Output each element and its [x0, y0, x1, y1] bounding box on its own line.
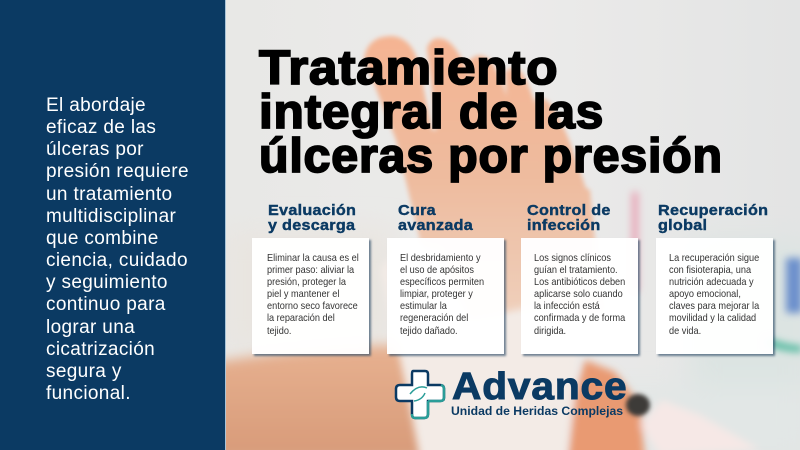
card: Control de infección: Los signos clínicos: [534, 253, 611, 264]
intro text: úlceras por: [46, 139, 144, 160]
heading: Control de infección: infección: [527, 218, 600, 234]
heading: Recuperación global: [658, 203, 768, 234]
card: Cura avanzada: limpiar, proteger y: [400, 289, 473, 300]
intro text: ciencia, cuidado: [46, 250, 188, 271]
instrument tip: [626, 394, 650, 416]
intro text: funcional.: [46, 383, 131, 404]
card: Control de infección: la infección está: [534, 301, 600, 312]
card: Control de infección: aplicarse solo cuando: [534, 289, 623, 300]
intro text: segura y: [46, 361, 122, 382]
intro text: presión requiere: [46, 161, 189, 182]
heading: Recuperación global: global: [658, 218, 707, 234]
card: Control de infección: [521, 238, 638, 354]
logo: Advance: [394, 366, 627, 420]
foot with toes: [364, 36, 602, 320]
card: Recuperación global: de vida.: [669, 326, 701, 337]
intro text: continuo para: [46, 294, 166, 315]
card: Recuperación global: nutrición adecuada y: [669, 277, 754, 288]
heading: Recuperación global: Recuperación: [658, 203, 768, 219]
heading: Control de infección: Control de: [527, 203, 611, 219]
heading: Evaluación y descarga: y descarga: [268, 218, 355, 234]
logo name: Advance: [452, 366, 627, 408]
leg: [215, 345, 440, 450]
icon: medical cross with hands: [394, 370, 446, 420]
card: Evaluación y descarga: tejido.: [267, 326, 291, 337]
intro text: lograr una: [46, 317, 135, 338]
card: Cura avanzada: estimular la: [400, 301, 447, 312]
intro text: y seguimiento: [46, 272, 168, 293]
card: Control de infección: dirigida.: [534, 326, 566, 337]
gloved hand and instrument: [380, 192, 800, 450]
card: Evaluación y descarga: primer paso: aliviar la: [267, 265, 354, 276]
card: Evaluación y descarga: presión, proteger la: [267, 277, 346, 288]
card: Evaluación y descarga: [252, 238, 369, 354]
card: Cura avanzada: El desbridamiento y: [400, 253, 481, 264]
card: Recuperación global: [656, 238, 773, 354]
heading: Cura avanzada: [398, 203, 474, 234]
title: integral de las: [259, 86, 604, 139]
heading: Cura avanzada: Cura: [398, 203, 436, 219]
card: Cura avanzada: regeneración del: [400, 313, 468, 324]
card: Evaluación y descarga: Eliminar la causa es el: [267, 253, 359, 264]
card: Recuperación global: movilidad y la calidad: [669, 313, 756, 324]
intro text: El abordaje: [46, 95, 146, 116]
title: Tratamiento: [259, 42, 558, 95]
title: úlceras por presión: [259, 130, 723, 183]
heading: Evaluación y descarga: [268, 203, 356, 234]
card: Evaluación y descarga: entorno seco favorece: [267, 301, 358, 312]
logo tagline: Unidad de Heridas Complejas: [451, 404, 623, 418]
intro text: un tratamiento: [46, 184, 172, 205]
background photo: foot and gloved hands: [226, 0, 800, 450]
card: Recuperación global: con fisioterapia, una: [669, 265, 751, 276]
intro text: que combine: [46, 228, 159, 249]
card: Control de infección: guían el tratamiento.: [534, 265, 618, 276]
intro text: cicatrización: [46, 339, 155, 360]
card: Evaluación y descarga: la reparación del: [267, 313, 335, 324]
card: Control de infección: confirmada y de forma: [534, 313, 625, 324]
card: Recuperación global: La recuperación sigue: [669, 253, 759, 264]
card: Cura avanzada: el uso de apósitos: [400, 265, 474, 276]
card: Cura avanzada: tejido dañado.: [400, 326, 458, 337]
intro text: eficaz de las: [46, 117, 156, 138]
heading: Cura avanzada: avanzada: [398, 218, 473, 234]
heading: Control de infección: [527, 203, 611, 234]
card: Recuperación global: apoyo emocional,: [669, 289, 741, 300]
card: Recuperación global: claves para mejorar la: [669, 301, 759, 312]
card: Control de infección: Los antibióticos deben: [534, 277, 625, 288]
card: Cura avanzada: específicos permiten: [400, 277, 484, 288]
intro text: [46, 95, 189, 404]
title: [258, 42, 723, 183]
left panel: [0, 0, 225, 450]
card: Cura avanzada: [387, 238, 504, 354]
card: Evaluación y descarga: piel y mantener el: [267, 289, 339, 300]
heading: Evaluación y descarga: Evaluación: [268, 203, 356, 219]
intro text: multidisciplinar: [46, 206, 176, 227]
